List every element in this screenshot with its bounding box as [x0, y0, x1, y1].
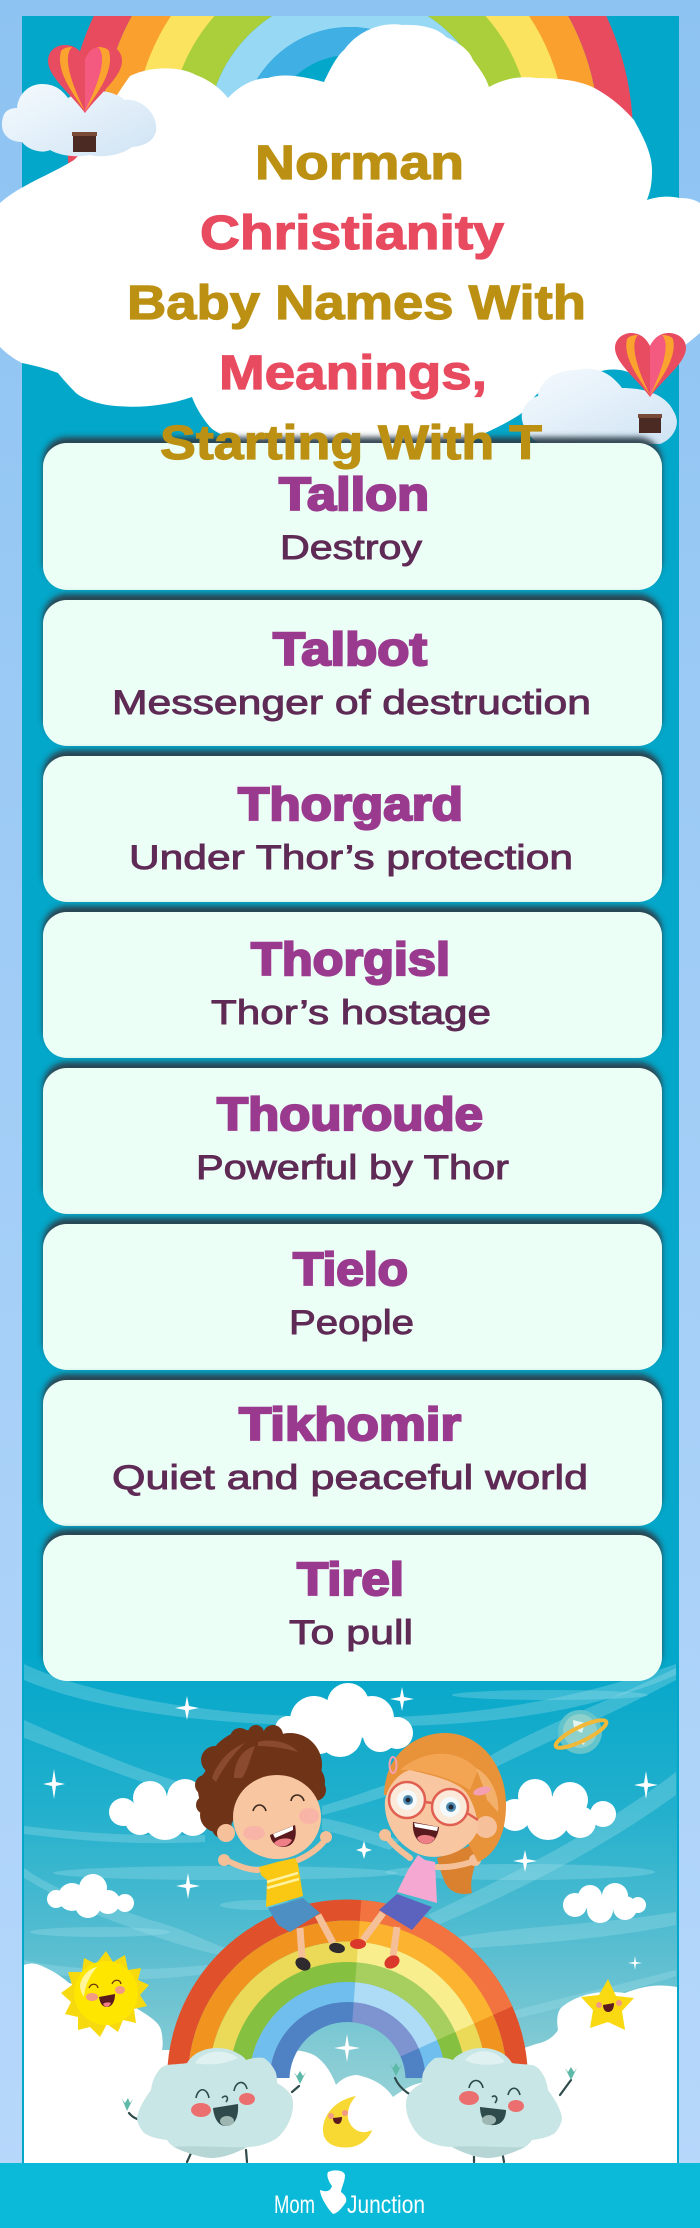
- name card 4: Thorgisl: [43, 912, 662, 1058]
- planet icon: [553, 1710, 609, 1754]
- name card 5: Thouroude: [43, 1068, 662, 1214]
- name card 8: Tirel: [43, 1535, 662, 1681]
- bottom scene sky: [24, 1664, 677, 2097]
- moon: [323, 2096, 372, 2147]
- right heart balloon: [615, 333, 686, 433]
- lower white clouds: [24, 1964, 677, 2163]
- name card 8: Tirel: To pull: [289, 1614, 413, 1652]
- sparkles: [43, 1687, 658, 1970]
- name card 4: Thorgisl: Thor’s hostage: [211, 994, 491, 1032]
- name card 2: Talbot: Messenger of destruction: [112, 684, 591, 722]
- footer bar: [0, 2163, 700, 2228]
- title: Starting With T: [160, 417, 542, 470]
- name card 3: Thorgard: Under Thor’s protection: [129, 839, 573, 877]
- sparkle under rainbow: [334, 2034, 360, 2062]
- name card 8: Tirel: Tirel: [297, 1553, 404, 1605]
- title: [127, 137, 586, 470]
- MomJunction logo: [274, 2170, 425, 2219]
- name card 1: Tallon: Tallon: [279, 468, 429, 520]
- girl: [350, 1733, 506, 1971]
- name card 6: Tielo: [43, 1224, 662, 1370]
- name card 7: Tikhomir: [43, 1380, 662, 1526]
- title: Baby Names With: [127, 277, 586, 330]
- title: Christianity: [200, 207, 504, 260]
- name card 1: Tallon: Destroy: [280, 529, 422, 567]
- right cloud character: [390, 2048, 577, 2162]
- name card 3: Thorgard: Thorgard: [238, 778, 463, 830]
- name card 2: Talbot: [43, 600, 662, 746]
- MomJunction logo: Mom: [274, 2191, 315, 2219]
- name card 5: Thouroude: Thouroude: [217, 1088, 483, 1140]
- name card 3: Thorgard: [43, 756, 662, 902]
- name card 5: Thouroude: Powerful by Thor: [196, 1149, 509, 1187]
- name card 1: Tallon: [43, 443, 662, 590]
- white header cloud: [0, 24, 700, 443]
- name card 2: Talbot: Talbot: [273, 623, 427, 675]
- right balloon cloud: [522, 369, 677, 444]
- top rainbow: [68, 16, 632, 164]
- star: [581, 1979, 634, 2030]
- name card 6: Tielo: People: [289, 1304, 414, 1342]
- name card 7: Tikhomir: Quiet and peaceful world: [112, 1459, 588, 1497]
- boy: [195, 1725, 346, 1973]
- left cloud character: [122, 2048, 306, 2162]
- name card 6: Tielo: Tielo: [293, 1243, 408, 1295]
- bottom rainbow: [168, 1900, 528, 2078]
- sun: [61, 1951, 149, 2037]
- left balloon cloud: [2, 84, 156, 156]
- title: Norman: [255, 137, 464, 190]
- name card 4: Thorgisl: Thorgisl: [251, 933, 450, 985]
- MomJunction logo: Junction: [347, 2191, 425, 2219]
- scene clouds: [47, 1683, 646, 1923]
- left heart balloon: [48, 45, 122, 152]
- name card 7: Tikhomir: Tikhomir: [239, 1398, 461, 1450]
- title: Meanings,: [219, 347, 487, 400]
